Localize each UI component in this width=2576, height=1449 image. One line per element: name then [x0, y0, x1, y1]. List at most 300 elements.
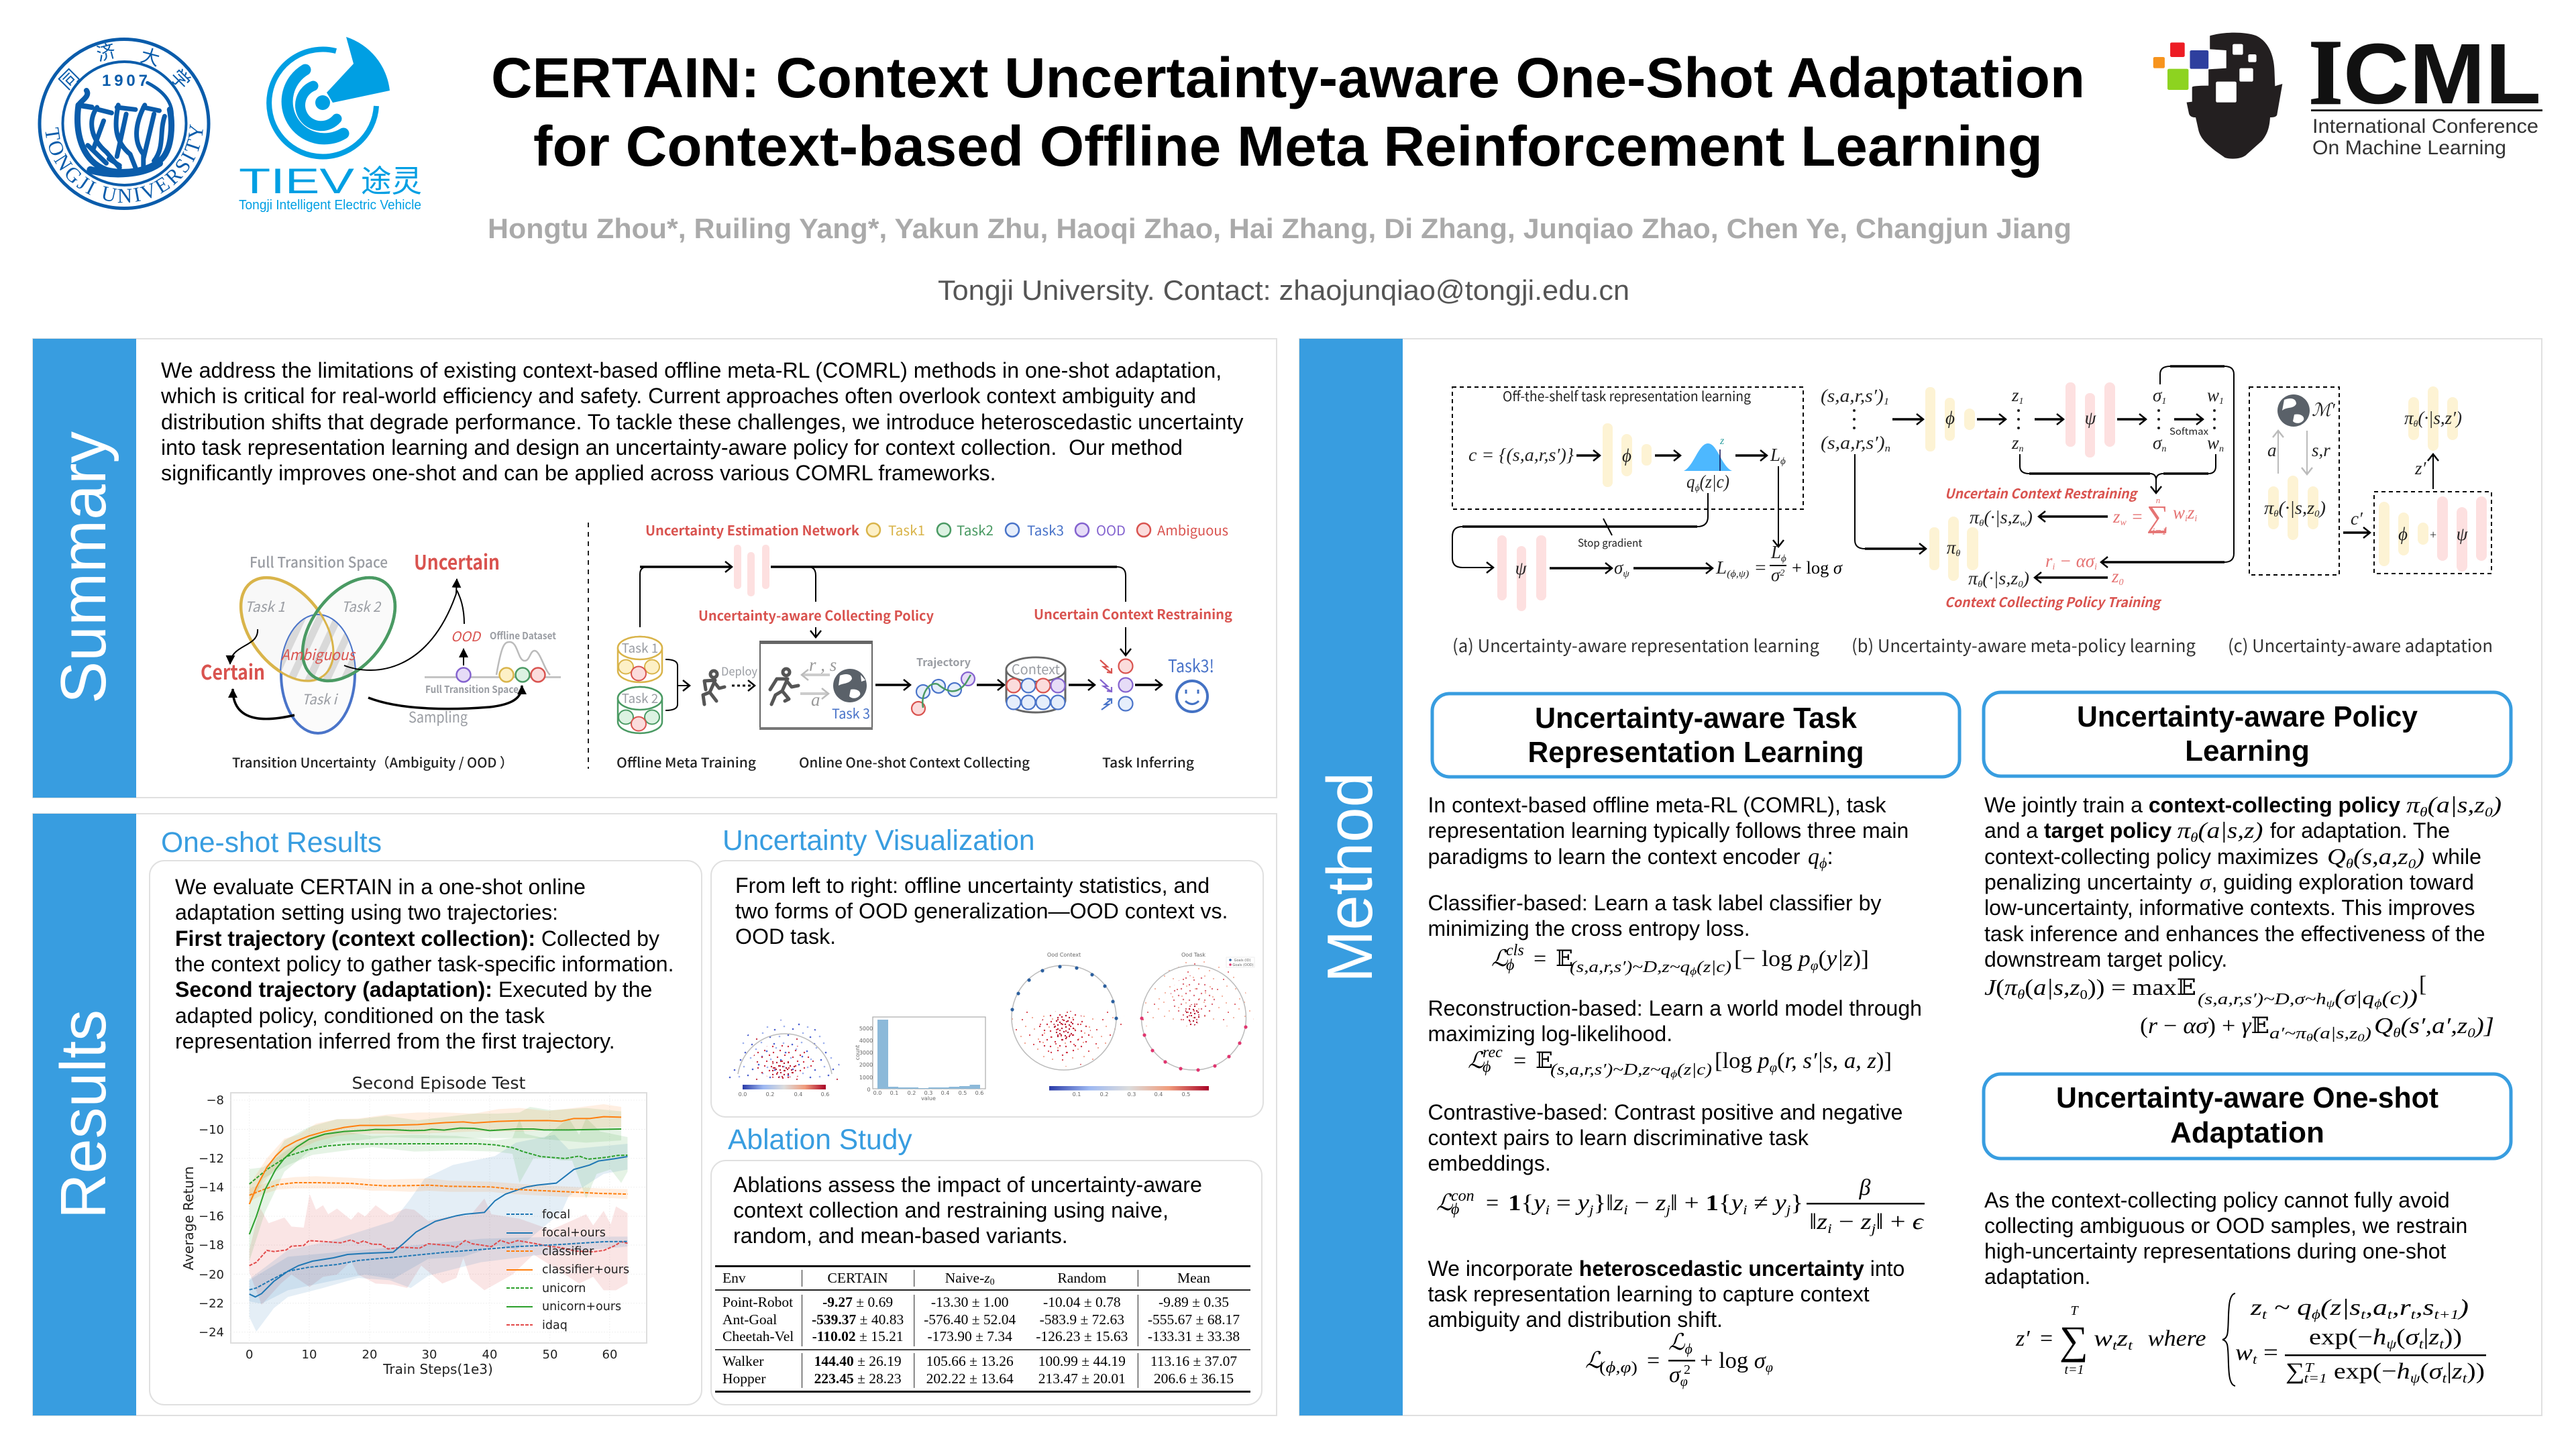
diagram (b): uncertainty-aware meta-policy learning: z: [2113, 506, 2121, 527]
equation: adaptation weights: z: [2428, 1325, 2439, 1350]
equation: policy objective: (a|s,z: [2313, 1025, 2358, 1042]
task 3 environment box: a: [811, 690, 820, 710]
equation: adaptation weights: ψ: [2410, 1371, 2420, 1386]
diagram (b): uncertainty-aware meta-policy learning: (s,a,r,s′): [1821, 386, 1878, 406]
caption: transition uncertainty: Transition Uncertainty（Ambiguity / OOD ）: [232, 752, 513, 771]
colorbar: OOD uncertainty: 0.2: [1100, 1091, 1108, 1097]
equation: policy objective: )]: [2473, 1014, 2494, 1038]
equation: adaptation weights: exp(− h: [2309, 1325, 2384, 1350]
legend: task colours: OOD: [1096, 520, 1126, 539]
equation: policy objective: ): [2363, 1025, 2371, 1042]
equation: adaptation weights: ): [2457, 1295, 2469, 1320]
equation: contrastive loss: ≠: [1747, 1191, 1774, 1216]
text block: one-shot adaptation: collecting ambiguous or OOD samples, we restrain: [1984, 1214, 2467, 1238]
table: ablation results: -10.04 ± 0.78: [1043, 1294, 1121, 1310]
diagram (a): uncertainty-aware representation learning: ϕ: [1781, 553, 1786, 564]
equation: contrastive loss: y: [1772, 1191, 1787, 1216]
section header: task representation learning: [1432, 694, 1960, 777]
card: one-shot results: [150, 861, 702, 1405]
equation: adaptation weights: ,a: [2365, 1295, 2387, 1320]
equation: adaptation weights: t: [2411, 1307, 2416, 1322]
diagram (a): uncertainty-aware representation learning: (ϕ,ψ): [1727, 569, 1749, 580]
diagram: transition uncertainty venn: Full Transition Space: [425, 682, 519, 696]
chart legend: focal+ours: [542, 1226, 606, 1240]
diagram (b): uncertainty-aware meta-policy learning: 1: [2161, 396, 2166, 407]
table: ablation results: Env: [722, 1270, 746, 1286]
histogram: uncertainty values: [855, 1017, 985, 1102]
text block: one-shot description: Second trajectory (adaptation): Executed by the: [175, 977, 652, 1002]
equation: contrastive loss: −: [1628, 1191, 1656, 1216]
diagram (b): uncertainty-aware meta-policy learning: (·|s,z: [1984, 507, 2020, 527]
scatter: OOD task: Goals (ID): [1234, 959, 1250, 963]
diagram (c): uncertainty-aware adaptation: z′: [2414, 458, 2427, 478]
logo: ICML: CML: [2343, 26, 2541, 122]
equation: policy objective: [: [2419, 972, 2426, 997]
section header: policy learning: Learning: [2185, 735, 2310, 767]
logo: Tongji University seal: 学: [166, 65, 195, 93]
section header: one-shot adaptation: Adaptation: [2170, 1116, 2324, 1149]
diagram (b): uncertainty-aware meta-policy learning: ∑: [2147, 499, 2169, 533]
text block: policy learning: (a|s,z): [2198, 818, 2263, 843]
text block: one-shot description: First trajectory (context collection): Collected by: [175, 926, 659, 951]
text block: task representation intro: [1428, 793, 1909, 871]
axis tick labels: 60: [602, 1348, 617, 1362]
diagram: transition uncertainty venn: OOD: [451, 626, 482, 645]
diagram (a): uncertainty-aware representation learning: Stop gradient: [1578, 534, 1642, 550]
scatter: offline uncertainty: 0.4: [794, 1091, 802, 1097]
text block: task representation intro: In context-based offline meta-RL (COMRL), task: [1428, 793, 1886, 817]
captions: pipeline stages: Online One-shot Context Collecting: [799, 752, 1030, 771]
equation: contrastive loss: 1{y: [1508, 1191, 1544, 1216]
equation: contrastive loss: ‖ +: [1670, 1191, 1705, 1216]
diagram (b): uncertainty-aware meta-policy learning: θ: [1978, 580, 1982, 590]
equation: adaptation weights: t: [2387, 1307, 2392, 1322]
equation: reconstruction loss: [1468, 1044, 1892, 1080]
text block: summary abstract: which is critical for real-world efficiency and safety. Current approaches often overlook context ambiguity and: [160, 384, 1196, 408]
equation: adaptation weights: t: [2463, 1371, 2467, 1386]
axis tick labels: −14: [199, 1181, 224, 1195]
equation: contrastive loss: =: [1486, 1191, 1499, 1216]
diagram (b): uncertainty-aware meta-policy learning: Uncertain Context Restraining: [1945, 483, 2139, 502]
diagram (b): uncertainty-aware meta-policy learning: Softmax: [2169, 425, 2208, 438]
logo: ICML: I: [2309, 21, 2343, 123]
logo: Tongji University seal: 济: [95, 40, 118, 65]
heading: Uncertainty Visualization: Uncertainty Visualization: [722, 824, 1035, 857]
logo: Tongji University seal: 1907: [102, 72, 148, 90]
diagram (a): uncertainty-aware representation learning: σ: [1614, 557, 1623, 578]
equation: policy objective: (: [2025, 975, 2033, 1000]
equation: classifier loss: [− log p: [1734, 947, 1810, 971]
table: ablation results: Mean: [1177, 1270, 1210, 1286]
title: for Context-based Offline Meta Reinforcement Learning: [533, 115, 2043, 178]
heading: One-shot Results: One-shot Results: [161, 826, 382, 859]
confidence bands and lines: [250, 1104, 627, 1332]
equation: contrastive loss: =: [1550, 1191, 1578, 1216]
diagram (b): uncertainty-aware meta-policy learning: Context Collecting Policy Training: [1945, 592, 2162, 611]
equation: uncertainty loss: 2: [1684, 1362, 1690, 1377]
trajectory: Trajectory: [916, 653, 971, 669]
equation: adaptation weights: w: [2094, 1326, 2109, 1351]
diagram (a): uncertainty-aware representation learning: ϕ: [1695, 483, 1700, 494]
equation: classifier loss: (: [1818, 947, 1826, 971]
panel: method: [1299, 339, 2542, 1415]
table: ablation results: -555.67 ± 68.17: [1148, 1311, 1240, 1328]
axis tick labels: 50: [543, 1348, 557, 1362]
table: ablation results: 213.47 ± 20.01: [1038, 1371, 1126, 1387]
histogram: uncertainty values: value: [921, 1095, 936, 1102]
text block: one-shot description: adapted policy, conditioned on the task: [175, 1004, 545, 1028]
equation: contrastive loss: ‖z: [1809, 1210, 1826, 1234]
equation: reconstruction loss: rec: [1483, 1044, 1503, 1061]
equation: contrastive loss: i: [1743, 1203, 1747, 1218]
text block: task representation intro: paradigms to learn the context encoder: [1428, 845, 1801, 869]
legend: task colours: Task3: [1027, 520, 1064, 539]
text block: one-shot description: We evaluate CERTAIN in a one-shot online: [175, 875, 586, 899]
text block: one-shot adaptation: adaptation.: [1984, 1265, 2090, 1289]
diagram: transition uncertainty venn: Task i: [302, 689, 339, 709]
chart legend: focal: [542, 1208, 570, 1222]
diagram (b): uncertainty-aware meta-policy learning: w: [2207, 433, 2219, 453]
text block: policy learning: and a target policy: [1984, 818, 2171, 843]
equation: classifier loss: 𝔼: [1556, 947, 1573, 971]
equation: adaptation weights: (: [2396, 1325, 2406, 1350]
text block: contrastive-based: [1428, 1100, 1902, 1175]
chart legend: idaq: [542, 1319, 568, 1332]
histogram: uncertainty values: 0.5: [959, 1090, 967, 1096]
equation: policy objective: θ: [2306, 1032, 2313, 1044]
text block: policy learning: [1984, 793, 2502, 971]
equation: uncertainty loss: [1585, 1330, 1773, 1389]
text block: policy learning: (a|s,z: [2428, 793, 2485, 818]
task 3 environment box: Task 3: [832, 703, 870, 722]
equation: policy objective: σ|q: [2344, 988, 2374, 1009]
text block: policy learning: θ: [2190, 830, 2198, 845]
table: ablation results: 223.45 ± 28.23: [814, 1371, 902, 1387]
colorbar: OOD uncertainty: 0.5: [1182, 1091, 1190, 1097]
diagram (b): uncertainty-aware meta-policy learning: 1: [2019, 396, 2024, 407]
scatter: offline uncertainty: [729, 1020, 841, 1097]
context cylinder: Context: [1012, 659, 1061, 678]
equation: reconstruction loss: [log p: [1715, 1049, 1769, 1073]
logo: Tongji University seal: 大: [138, 45, 162, 70]
equation: contrastive loss: 1{y: [1705, 1191, 1741, 1216]
equation: adaptation weights: where: [2148, 1326, 2206, 1351]
text block: reconstruction-based: Reconstruction-based: Learn a world model through: [1428, 996, 1922, 1020]
equation: adaptation weights: [2015, 1293, 2486, 1386]
text block: one-shot description: representation inferred from the first trajectory.: [175, 1029, 615, 1053]
captions: diagram parts: (c) Uncertainty-aware adaptation: [2228, 633, 2493, 657]
equation: adaptation weights: ,s: [2416, 1295, 2434, 1320]
equation: classifier loss: (z|c): [1697, 959, 1731, 976]
diagram (b): uncertainty-aware meta-policy learning: θ: [1955, 549, 1960, 559]
equation: uncertainty loss: φ: [1766, 1360, 1773, 1375]
logo: TIEV: 途灵: [361, 164, 422, 199]
task 2 cylinder: Task 2: [622, 689, 658, 707]
text block: task representation intro: q: [1808, 845, 1819, 869]
heading: Summary: Summary: [48, 431, 119, 704]
equation: policy objective: ϕ: [2374, 997, 2382, 1010]
table: ablation results: Walker: [722, 1353, 764, 1369]
text block: summary abstract: distribution shifts that degrade performance. To tackle these challenges, we introduce heteroscedastic uncertainty: [161, 410, 1244, 434]
text block: policy learning: σ: [2200, 870, 2212, 895]
equation: adaptation weights: exp(−: [2327, 1359, 2397, 1384]
text block: summary abstract: into task representation learning and design an uncertainty-aware policy for context collection. Our method: [161, 435, 1183, 460]
diagram (b): uncertainty-aware meta-policy learning: =: [2127, 506, 2143, 527]
axis tick labels: −18: [199, 1238, 224, 1252]
diagram (c): uncertainty-aware adaptation: c′: [2351, 508, 2363, 529]
diagram (c): uncertainty-aware adaptation: +: [2429, 528, 2437, 541]
arrows: meta-policy flow: [1855, 366, 2234, 578]
axis tick labels: 10: [302, 1348, 317, 1362]
text block: policy learning: , guiding exploration toward: [2211, 870, 2474, 894]
equation: adaptation weights: |: [2423, 1325, 2429, 1350]
diagram: transition uncertainty venn: Full Transition Space: [250, 551, 388, 572]
diagram (b): uncertainty-aware meta-policy learning: (s,a,r,s′): [1821, 433, 1878, 453]
equation: adaptation weights: (z|s: [2320, 1295, 2361, 1320]
text block: policy learning: penalizing uncertainty: [1984, 870, 2192, 894]
text block: task representation intro: :: [1827, 844, 1833, 869]
table: ablation results: 144.40 ± 26.19: [814, 1353, 902, 1369]
captions: diagram parts: (a) Uncertainty-aware representation learning: [1452, 633, 1819, 657]
table: ablation results: Naive-z: [945, 1270, 990, 1286]
trajectory: [912, 653, 975, 715]
equation: adaptation weights: )): [2444, 1325, 2462, 1350]
logo: ICML: On Machine Learning: [2312, 137, 2506, 159]
scatter: OOD task: Goals (OOD): [1232, 963, 1254, 967]
logo: Tongji University seal: TONGJI UNIVERSITY: [46, 124, 203, 203]
equation: adaptation weights: t: [2439, 1337, 2444, 1352]
equation: classifier loss: cls: [1506, 942, 1524, 959]
uncertainty estimation network bars: [734, 545, 769, 596]
equation: policy objective: [1984, 972, 2494, 1044]
table: ablation results: -576.40 ± 52.04: [924, 1311, 1016, 1328]
text block: policy learning: downstream target policy.: [1984, 947, 2227, 971]
authors: Hongtu Zhou*, Ruiling Yang*, Yakun Zhu, Haoqi Zhao, Hai Zhang, Di Zhang, Junqiao Zhao, Chen Ye, Changjun Jiang: [488, 213, 2072, 244]
text block: reconstruction-based: [1428, 996, 1922, 1046]
section header: one-shot adaptation: [1984, 1074, 2511, 1159]
table: ablation results: 0: [990, 1277, 995, 1287]
diagram (a): uncertainty-aware representation learning: σ: [1771, 565, 1780, 585]
equation: contrastive loss: z: [1613, 1191, 1623, 1216]
text block: policy learning: while: [2432, 845, 2481, 869]
diagram (a): uncertainty-aware representation learning: [1452, 386, 1843, 611]
axis tick labels: −16: [199, 1210, 224, 1224]
equation: reconstruction loss: (: [1777, 1049, 1785, 1073]
equation: uncertainty loss: σ: [1669, 1362, 1680, 1387]
text block: visualization description: two forms of OOD generalization—OOD context vs.: [735, 899, 1228, 923]
equation: classifier loss: φ: [1811, 959, 1818, 973]
equation: policy objective: 0: [2080, 987, 2088, 1002]
histogram: uncertainty values: 0.0: [873, 1090, 881, 1096]
equation: adaptation weights: |: [2447, 1359, 2452, 1384]
chart legend: unicorn: [542, 1282, 586, 1295]
captions: pipeline stages: [616, 752, 1194, 771]
table: ablation results: Ant-Goal: [722, 1311, 777, 1328]
equation: adaptation weights: t: [2419, 1337, 2424, 1352]
text block: policy learning: low-uncertainty, informative contexts. This improves: [1984, 896, 2475, 920]
card: uncertainty visualization: [711, 861, 1263, 1117]
text block: policy learning: (s,a,z: [2353, 845, 2408, 869]
diagram (c): uncertainty-aware adaptation: a: [2267, 440, 2277, 460]
diagram (c): uncertainty-aware adaptation: π: [2264, 498, 2273, 518]
diagram (c): uncertainty-aware adaptation: s,r: [2312, 440, 2330, 460]
text block: one-shot adaptation: [1984, 1188, 2467, 1289]
logo: Tongji University seal: 同: [55, 65, 83, 93]
equation: contrastive loss: [1436, 1175, 1925, 1236]
diagram (a): uncertainty-aware representation learning: ϕ: [1780, 456, 1786, 467]
chart legend: unicorn+ours: [542, 1300, 621, 1313]
line chart: second episode test: Train Steps(1e3): [382, 1361, 493, 1377]
text block: policy learning: π: [2406, 793, 2418, 818]
equation: contrastive loss: j: [1869, 1222, 1876, 1236]
equation: contrastive loss: i: [1546, 1203, 1550, 1218]
text block: policy learning: Q: [2327, 845, 2344, 869]
text block: visualization description: From left to right: offline uncertainty statistics, and: [735, 873, 1210, 898]
equation: adaptation weights: z′: [2015, 1326, 2030, 1351]
equation: contrastive loss: }‖: [1593, 1191, 1613, 1216]
diagram (b): uncertainty-aware meta-policy learning: z: [2187, 502, 2195, 523]
equation: reconstruction loss: φ: [1770, 1061, 1777, 1075]
diagram: transition uncertainty venn: Task 1: [245, 596, 285, 616]
text block: task representation intro: ϕ: [1819, 855, 1827, 871]
legend: task colours: Uncertainty Estimation Network: [645, 520, 859, 539]
diagram (b): uncertainty-aware meta-policy learning: i: [2052, 562, 2055, 572]
section header: one-shot adaptation: Uncertainty-aware One-shot: [2056, 1081, 2438, 1114]
logo: ICML: International Conference: [2312, 115, 2538, 138]
logo: ICML: [2153, 21, 2542, 159]
table: ablation results: Hopper: [722, 1371, 765, 1387]
equation: contrastive loss: ϵ: [1913, 1210, 1925, 1234]
diagram (b): uncertainty-aware meta-policy learning: i: [2094, 562, 2097, 572]
diagram (b): uncertainty-aware meta-policy learning: n: [1885, 443, 1890, 454]
equation: contrastive loss: ‖ +: [1876, 1210, 1913, 1234]
diagram (b): uncertainty-aware meta-policy learning: [1821, 366, 2234, 611]
equation: reconstruction loss: ϕ: [1670, 1069, 1677, 1080]
equation: adaptation weights: h: [2397, 1359, 2410, 1384]
table: ablation results: 206.6 ± 36.15: [1154, 1371, 1234, 1387]
text block: classifier-based: Classifier-based: Learn a task label classifier by: [1428, 891, 1881, 915]
diagram (c): uncertainty-aware adaptation: [2249, 386, 2491, 575]
diagram (a): uncertainty-aware representation learning: c = {(s,a,r,s′)}: [1468, 445, 1574, 465]
histogram: uncertainty values: 0: [867, 1087, 871, 1093]
diagram (b): uncertainty-aware meta-policy learning: ψ: [2085, 408, 2097, 428]
equation: policy objective: θ: [2017, 987, 2025, 1002]
diagram (b): uncertainty-aware meta-policy learning: 0: [2018, 580, 2023, 590]
scatter: OOD context: Ood Context: [1047, 952, 1081, 958]
diagram (b): uncertainty-aware meta-policy learning: w: [2121, 518, 2127, 528]
equation: adaptation weights: w: [2235, 1340, 2251, 1365]
equation: policy objective: ψ: [2326, 998, 2336, 1010]
text block: contrastive-based: embeddings.: [1428, 1151, 1551, 1175]
equation: uncertainty loss: (ϕ,φ ): [1599, 1359, 1638, 1377]
text block: ablation description: context collection and restraining using naive,: [733, 1198, 1169, 1222]
histogram: uncertainty values: 0.4: [941, 1090, 949, 1096]
text block: policy learning: θ: [2346, 857, 2353, 871]
equation: policy objective: (s,a,r,s′)~D,σ~h: [2198, 991, 2298, 1008]
equation: contrastive loss: j: [1664, 1203, 1670, 1218]
histogram: uncertainty values: 0.2: [908, 1090, 916, 1096]
equation: classifier loss: (s,a,r,s′)~D,z~q: [1570, 959, 1668, 976]
diagram (b): uncertainty-aware meta-policy learning: n: [2156, 495, 2160, 505]
equation: adaptation weights: z: [2251, 1295, 2259, 1320]
text block: ablation description: Ablations assess the impact of uncertainty-aware: [733, 1173, 1202, 1197]
equation: classifier loss: y|z)]: [1826, 947, 1868, 971]
equation: adaptation weights: T: [2070, 1303, 2079, 1318]
task 1 cylinder: [618, 637, 662, 682]
text block: summary abstract: [160, 358, 1244, 485]
diagram: transition uncertainty venn: [201, 546, 561, 771]
equation: contrastive loss: β: [1859, 1175, 1871, 1200]
text block: classifier-based: [1428, 891, 1881, 941]
text block: ablation description: [733, 1173, 1202, 1248]
diagram (c): uncertainty-aware adaptation: θ: [2273, 509, 2279, 519]
axis tick labels: 30: [422, 1348, 437, 1362]
diagram (b): uncertainty-aware meta-policy learning: n: [2219, 444, 2224, 454]
scatter: OOD task: Ood Task: [1181, 952, 1205, 958]
diagram (c): uncertainty-aware adaptation: ψ: [2457, 524, 2469, 544]
text block: one-shot description: adaptation setting using two trajectories:: [175, 900, 558, 924]
table: ablation results: Cheetah-Vel: [722, 1328, 794, 1344]
diagram: CERTAIN pipeline: Uncertainty-aware Collecting Policy: [698, 605, 934, 625]
text block: one-shot adaptation: As the context-collecting policy cannot fully avoid: [1984, 1188, 2450, 1212]
diagram (b): uncertainty-aware meta-policy learning: z: [2112, 566, 2119, 586]
text block: task representation intro: representation learning typically follows three main: [1428, 818, 1909, 843]
line chart: second episode test: Second Episode Test: [352, 1073, 526, 1093]
equation: adaptation weights: t: [2253, 1352, 2257, 1367]
axis tick labels: 20: [362, 1348, 377, 1362]
table: ablation results: -539.37 ± 40.83: [812, 1311, 904, 1328]
diagram (b): uncertainty-aware meta-policy learning: n: [2161, 444, 2166, 454]
heading: Ablation Study: Ablation Study: [728, 1124, 912, 1156]
equation: adaptation weights: T: [2305, 1360, 2315, 1375]
equation: reconstruction loss: 𝔼: [1536, 1049, 1553, 1073]
equation: contrastive loss: y: [1575, 1191, 1590, 1216]
diagram (b): uncertainty-aware meta-policy learning: w: [2020, 519, 2027, 529]
axis tick labels: −22: [199, 1297, 224, 1311]
equation: adaptation weights: z: [2116, 1326, 2128, 1351]
diagram (a): uncertainty-aware representation learning: L: [1770, 445, 1780, 465]
arrows: representation flow: [1452, 455, 1778, 568]
equation: adaptation weights: σ: [2406, 1325, 2420, 1350]
equation: uncertainty loss: ϕ: [1685, 1340, 1693, 1357]
diagram (a): uncertainty-aware representation learning: z: [1719, 435, 1725, 447]
diagram (b): uncertainty-aware meta-policy learning: w: [2173, 502, 2185, 523]
text block: visualization description: OOD task.: [735, 924, 836, 949]
table: ablation results: CERTAIN: [828, 1270, 888, 1286]
equation: policy objective: (r − ασ) + γ𝔼: [2140, 1014, 2269, 1038]
equation: policy objective: 0: [2357, 1032, 2365, 1044]
text block: one-shot description: [175, 875, 674, 1053]
diagram (c): uncertainty-aware adaptation: ): [2318, 498, 2326, 518]
diagram (b): uncertainty-aware meta-policy learning: (·|s,z: [1982, 568, 2019, 588]
scatter: OOD context: [1010, 952, 1124, 1070]
diagram (a): uncertainty-aware representation learning: L: [1771, 542, 1781, 562]
diagram (b): uncertainty-aware meta-policy learning: σ: [2153, 433, 2161, 453]
equation: uncertainty loss: ℒ: [1585, 1348, 1603, 1373]
table: ablation results: -13.30 ± 1.00: [931, 1294, 1009, 1310]
icon: runner deploy: [703, 671, 724, 704]
affiliation and contact: Tongji University. Contact: zhaojunqiao@tongji.edu.cn: [938, 274, 1629, 306]
diagram (c): uncertainty-aware adaptation: (·|s,z′): [2418, 408, 2462, 428]
equation: adaptation weights: ∑: [2059, 1318, 2088, 1362]
equation: classifier loss: ϕ: [1690, 966, 1697, 977]
captions: diagram parts: (b) Uncertainty-aware meta-policy learning: [1851, 633, 2196, 657]
equation: policy objective: a|s,z: [2033, 975, 2080, 1000]
task 3 environment box: r , s: [809, 655, 837, 675]
text block: policy learning: context-collecting policy maximizes: [1984, 845, 2318, 869]
legend: task colours: [645, 520, 1228, 539]
card: ablation study: [711, 1161, 1262, 1405]
